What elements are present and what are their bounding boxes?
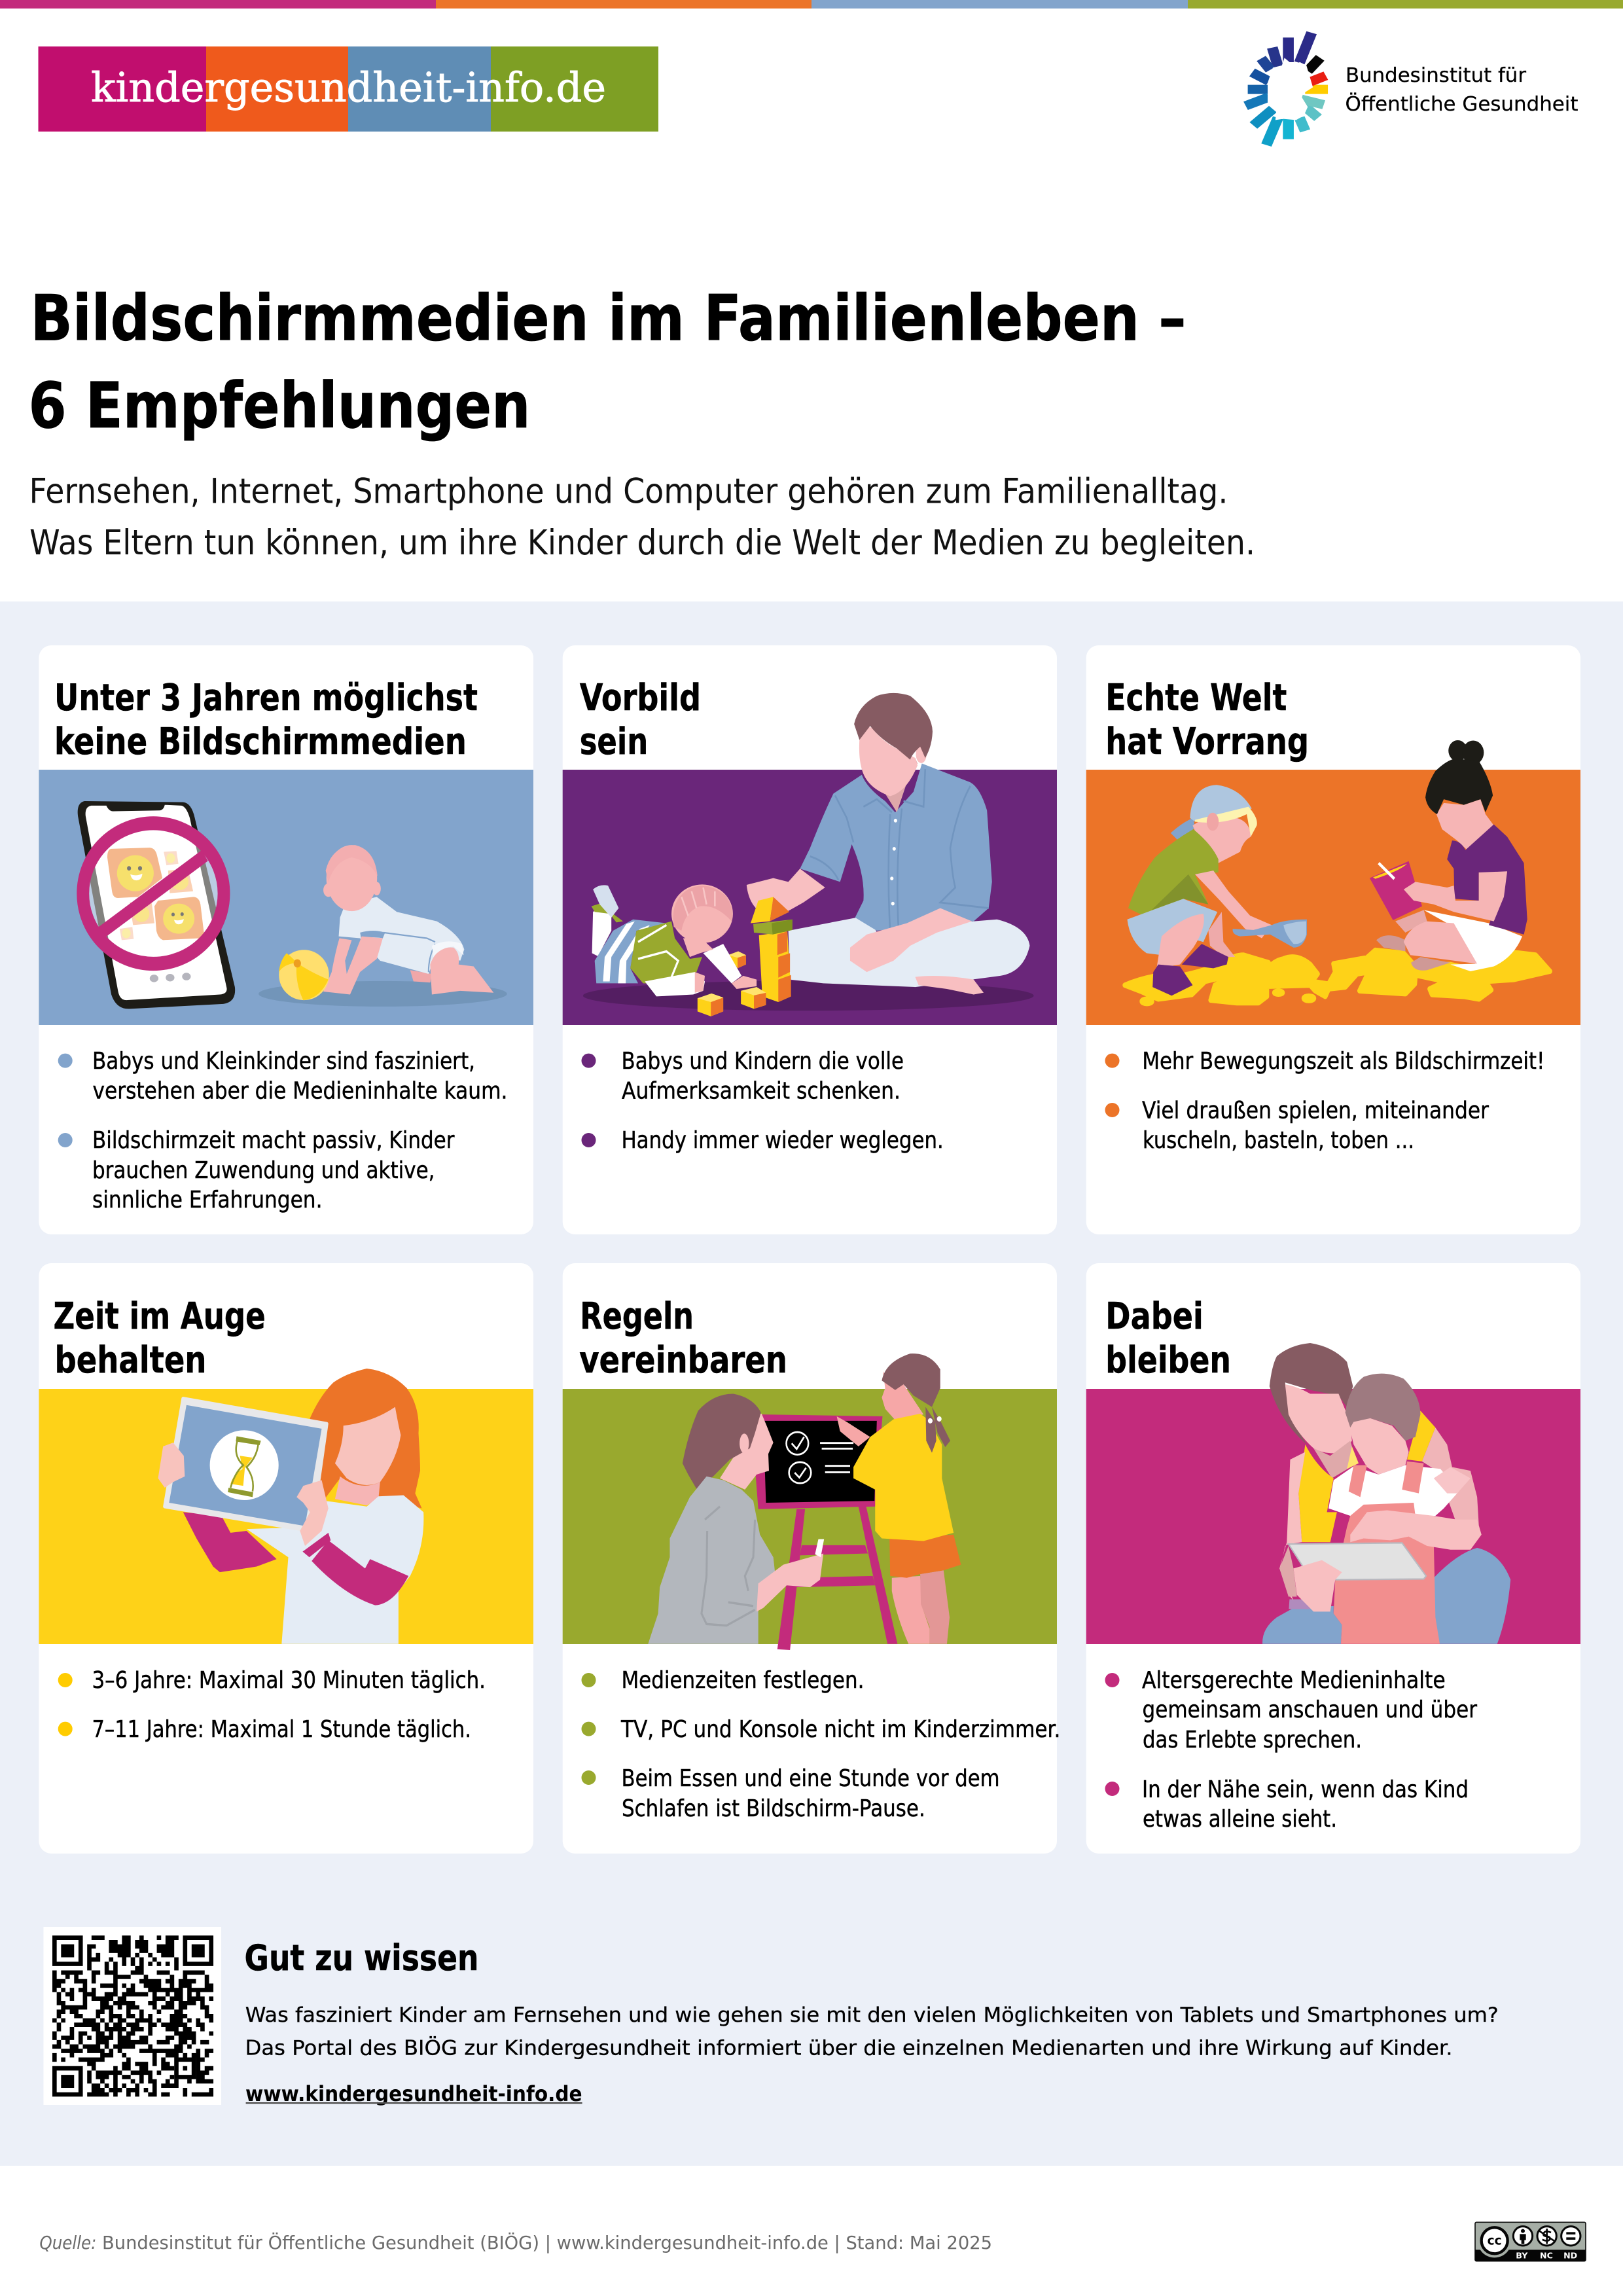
section: Gut zu wissen	[245, 1937, 1499, 2106]
list: gemeinsam anschauen und über	[1143, 1696, 1477, 1723]
list: sinnliche Erfahrungen.	[92, 1187, 322, 1213]
subtitle: Was Eltern tun können, um ihre Kinder durch die Welt der Medien zu begleiten.	[29, 523, 1255, 563]
icon: CC BY-NC-ND licence badge	[1475, 2222, 1586, 2261]
panel: Echte Welt	[1086, 645, 1580, 1234]
panel: Unter 3 Jahren	[39, 645, 533, 1234]
heading: Zeit im Auge	[54, 1295, 266, 1338]
background panel	[0, 601, 1623, 2166]
list: Viel draußen spielen, miteinander	[1142, 1097, 1489, 1124]
illustration: girl holding tablet	[39, 1369, 533, 1644]
subtitle	[29, 471, 1255, 563]
icon: girl	[837, 1354, 961, 1644]
list: Altersgerechte Medieninhalte	[1142, 1667, 1446, 1694]
list: 3–6 Jahre: Maximal 30 Minuten täglich.	[92, 1667, 486, 1694]
illustration: father and baby with blocks	[563, 693, 1057, 1025]
section: Gut zu wissen: Gut zu wissen	[245, 1937, 479, 1979]
illustration: mother and child at chalkboard	[563, 1354, 1057, 1650]
list: verstehen aber die Medieninhalte kaum.	[93, 1078, 508, 1105]
list	[581, 1667, 1060, 1822]
icon: mother	[648, 1394, 824, 1644]
heading	[580, 677, 701, 763]
illustration: baby and crossed-out phone	[39, 770, 533, 1025]
list: Mehr Bewegungszeit als Bildschirmzeit!	[1142, 1048, 1544, 1075]
section: Gut zu wissen: www.kindergesundheit-info.de	[245, 2081, 582, 2106]
list: In der Nähe sein, wenn das Kind	[1142, 1776, 1469, 1803]
icon: sand	[1125, 950, 1550, 1003]
icon: phone with prohibition sign	[78, 801, 235, 1009]
heading: hat Vorrang	[1105, 721, 1309, 763]
icon: crawling baby with ball	[259, 845, 507, 1007]
icon: CC BY-NC-ND licence badge: BY	[1516, 2251, 1528, 2261]
heading: keine Bildschirmmedien	[54, 721, 467, 763]
top colour stripe	[0, 0, 1623, 9]
list: Medienzeiten festlegen.	[622, 1667, 864, 1694]
logo: Bundesinstitut für Öffentliche Gesundheit	[1245, 33, 1578, 145]
illustration: children in sandbox	[1086, 740, 1580, 1025]
heading: sein	[580, 721, 648, 763]
list: brauchen Zuwendung und aktive,	[92, 1157, 435, 1184]
heading: Vorbild	[580, 677, 701, 719]
icon: tablet	[1289, 1543, 1426, 1611]
icon: CC BY-NC-ND licence badge: NC	[1540, 2251, 1553, 2261]
list: Babys und Kindern die volle	[622, 1048, 904, 1075]
icon: block tower	[698, 897, 793, 1016]
logo: kindergesundheit-info.de: kindergesundheit-info.de	[91, 63, 606, 111]
icon: sunburst Germany emblem	[1245, 33, 1328, 145]
list: 7–11 Jahre: Maximal 1 Stunde täglich.	[92, 1716, 471, 1743]
heading	[579, 1295, 787, 1382]
heading	[1105, 1295, 1231, 1382]
icon: baby lying on floor	[592, 884, 757, 996]
panel: Regeln vereinbaren	[563, 1263, 1060, 1854]
subtitle: Fernsehen, Internet, Smartphone und Computer gehören zum Familienalltag.	[29, 471, 1228, 512]
list: Beim Essen und eine Stunde vor dem	[622, 1765, 1000, 1792]
icon: CC BY-NC-ND licence badge: ND	[1563, 2251, 1577, 2261]
heading: Regeln	[580, 1295, 694, 1338]
icon: chalkboard easel	[756, 1414, 897, 1650]
icon: tablet with hourglass	[165, 1399, 327, 1531]
list: Schlafen ist Bildschirm-Pause.	[622, 1795, 925, 1822]
icon: CC BY-NC-ND licence badge: cc	[1488, 2234, 1502, 2248]
panel: Vorbild sein	[563, 645, 1057, 1234]
list	[1105, 1667, 1477, 1833]
icon: girl with book	[1370, 740, 1527, 971]
title: Bildschirmmedien im Familienleben –	[30, 281, 1186, 355]
logo: Bundesinstitut für Öffentliche Gesundheit: Bundesinstitut für	[1346, 64, 1527, 87]
icon: mother	[1262, 1343, 1510, 1644]
list: etwas alleine sieht.	[1143, 1806, 1337, 1833]
heading	[1105, 677, 1309, 763]
heading: Unter 3 Jahren möglichst	[54, 677, 478, 719]
source line: Bundesinstitut für Öffentliche Gesundheit (BIÖG) | www.kindergesundheit-info.de | Stand: Mai 2025	[102, 2231, 992, 2253]
QR code	[43, 1927, 221, 2105]
icon: hands	[158, 1443, 330, 1557]
heading: Dabei	[1105, 1295, 1204, 1338]
heading: behalten	[55, 1339, 207, 1382]
list: das Erlebte sprechen.	[1143, 1727, 1362, 1753]
logo: kindergesundheit-info.de	[38, 46, 658, 132]
icon: child	[1329, 1374, 1482, 1644]
list: Handy immer wieder weglegen.	[622, 1127, 944, 1154]
list	[58, 1048, 507, 1213]
list	[581, 1048, 944, 1154]
heading: bleiben	[1105, 1339, 1231, 1382]
icon: boy with shovel	[1127, 785, 1307, 996]
heading	[54, 1295, 266, 1382]
list: kuscheln, basteln, toben ...	[1143, 1127, 1414, 1154]
list	[1105, 1048, 1544, 1154]
list: Bildschirmzeit macht passiv, Kinder	[92, 1127, 455, 1154]
heading	[54, 677, 478, 763]
panel: Dabei bleiben	[1086, 1263, 1580, 1854]
title	[29, 281, 1186, 442]
list: Babys und Kleinkinder sind fasziniert,	[92, 1048, 475, 1075]
logo: Bundesinstitut für Öffentliche Gesundheit: Öffentliche Gesundheit	[1346, 92, 1578, 116]
title: 6 Empfehlungen	[29, 369, 530, 442]
section: Gut zu wissen: Was fasziniert Kinder am Fernsehen und wie gehen sie mit den vielen Möglichkeiten von Tablets und Smartphones um?	[245, 2003, 1499, 2027]
icon: father	[747, 693, 1029, 995]
illustration: mother and child with tablet	[1086, 1343, 1580, 1644]
heading: vereinbaren	[579, 1339, 787, 1382]
list	[58, 1667, 486, 1743]
icon: girl	[183, 1369, 423, 1644]
panel: Zeit im Auge behalten	[39, 1263, 533, 1854]
source line: Quelle:	[39, 2232, 96, 2253]
list: Aufmerksamkeit schenken.	[622, 1078, 901, 1105]
section: Gut zu wissen: Das Portal des BIÖG zur Kindergesundheit informiert über die einzelnen Medienarten und ihre Wirkung auf Kinder.	[245, 2036, 1453, 2060]
heading: Echte Welt	[1105, 677, 1287, 719]
list: TV, PC und Konsole nicht im Kinderzimmer.	[620, 1716, 1060, 1743]
